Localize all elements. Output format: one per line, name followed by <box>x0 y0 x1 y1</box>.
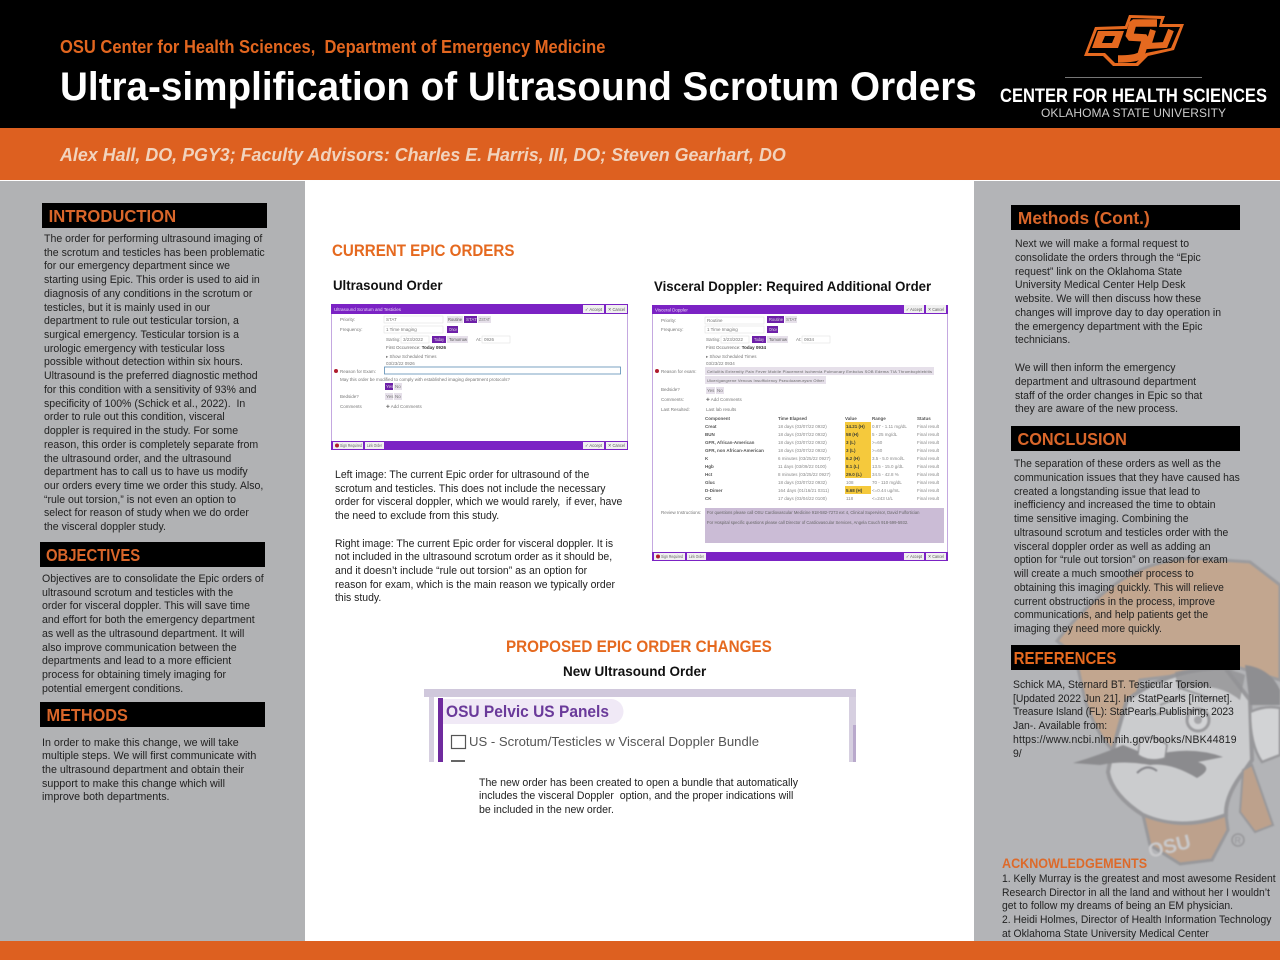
text: introduction: the visceral doppler study. <box>44 521 166 533</box>
text: objectives: departments and lead to a more efficient <box>42 655 231 667</box>
screenshot: ultrasound order form: Routine <box>448 317 462 322</box>
screenshot: ultrasound order form: Comments <box>340 404 363 409</box>
screenshot: visceral doppler order form: 8 minutes (03/25/22 0927) <box>778 472 831 477</box>
screenshot: visceral doppler order form: 29.0 (L) <box>846 472 862 477</box>
screenshot: ultrasound order form: ✚ Add Comments <box>386 404 423 409</box>
text: conclusion: current obstructions in the process, improve <box>1014 596 1215 608</box>
icon: mascot watermark: R <box>1234 836 1242 846</box>
screenshot: visceral doppler order form: 3/23/2022 <box>723 337 744 342</box>
screenshot: ultrasound order form: 03/23/22 0926 <box>386 361 415 366</box>
screenshot: visceral doppler order form: Last lab results <box>706 407 737 412</box>
text: image captions: scrotum and testicles. This does not include the necessary <box>335 483 606 495</box>
text: methods continued: consolidate the orders through the “Epic <box>1015 252 1201 264</box>
screenshot: visceral doppler order form: Comments: <box>661 397 684 402</box>
screenshot: visceral doppler order form: 164 days (01/16/21 0311) <box>778 488 829 493</box>
screenshot: visceral doppler order form: Final result <box>917 472 940 477</box>
text: image captions <box>335 469 622 604</box>
text: conclusion: time sensitive imaging. Combining the <box>1014 513 1189 525</box>
screenshot: visceral doppler order form: ✕ Cancel <box>928 307 944 312</box>
screenshot: ultrasound order form: ZSTAT <box>479 317 490 322</box>
screenshot: visceral doppler order form: 17 days (03/04/22 0100) <box>778 496 827 501</box>
text: methods continued: department and ultrasound department <box>1015 376 1196 388</box>
screenshot: visceral doppler order form: 0.87 - 1.11 mg/dL <box>872 424 907 429</box>
text: references: https://www.ncbi.nlm.nih.gov/books/NBK44819 <box>1013 734 1237 746</box>
screenshot: visceral doppler order form: 70 - 110 mg/dL <box>872 480 902 485</box>
text: introduction: select for reason of study when we do order <box>44 507 249 519</box>
text: references: Treasure Island (FL): StatPearls Publishing; 2023 <box>1013 706 1234 718</box>
icon: OSU brand mark <box>1084 15 1184 66</box>
screenshot: visceral doppler order form: Value <box>845 416 857 421</box>
text: objectives: also improve communication between the <box>42 642 237 654</box>
screenshot: visceral doppler order form: 18 days (03/07/22 0932) <box>778 480 827 485</box>
text: conclusion: visceral doppler order as well as adding an <box>1014 540 1210 552</box>
screenshot: visceral doppler order form: D-Dimer <box>705 488 723 493</box>
screenshot: visceral doppler order form: GFR, African-American <box>705 440 755 445</box>
text: new order description: The new order has been created to open a bundle that automatically <box>479 776 798 788</box>
screenshot: visceral doppler order form: Final result <box>917 456 940 461</box>
text: methods continued <box>1015 238 1221 415</box>
text: introduction <box>44 233 265 533</box>
screenshot: visceral doppler order form: ✓ Accept <box>906 307 923 312</box>
screenshot: ultrasound order form: Yes <box>386 394 394 399</box>
text: references: 9/ <box>1013 748 1022 760</box>
screenshot: visceral doppler order form: Review Instructions: <box>661 510 701 515</box>
text: methods <box>42 736 256 803</box>
text: introduction: our orders every time we order this study. Also, <box>44 480 263 492</box>
logo: OSU Center for Health Sciences <box>1000 15 1267 120</box>
heading: methods continued: Methods (Cont.) <box>1018 208 1150 228</box>
text: introduction: department has to call us to have us modify <box>44 466 248 478</box>
panel: right column with mascot watermark <box>974 181 1280 941</box>
heading: methods: METHODS <box>47 705 128 725</box>
text: new order description: be included in the new order. <box>479 804 614 816</box>
screenshot: visceral doppler order form: Ulcer/gangrene Venous Insufficiency Pseudoaneurysm Other <box>707 378 825 383</box>
text: objectives <box>42 573 264 695</box>
screenshot: visceral doppler order form: Status <box>917 416 931 421</box>
screenshot: visceral doppler order form: BUN <box>705 432 715 437</box>
screenshot: new order bundle: OSU Pelvic US Panels <box>446 702 609 721</box>
screenshot: ultrasound order form: ✓ Accept <box>585 443 603 448</box>
heading: conclusion <box>1011 426 1240 451</box>
text: introduction: reason, this order is completely separate from <box>44 439 258 451</box>
text: methods continued: University Medical Center Help Desk <box>1015 279 1186 291</box>
screenshot: visceral doppler order form: 6 minutes (03/25/22 0927) <box>778 456 831 461</box>
screenshot: visceral doppler order form: First Occurrence: Today 0934 <box>706 345 766 350</box>
text: image captions: and it doesn’t include “rule out torsion” as an option for <box>335 565 587 577</box>
screenshot: visceral doppler order form: 11 days (03/09/22 0100) <box>778 464 827 469</box>
heading: proposed epic order changes: PROPOSED EPIC ORDER CHANGES <box>506 637 772 656</box>
screenshot: visceral doppler order form: For questions please call OSU Cardiovascular Medicine 918-582-7273 ext 4, Clinical Supervisor, David Fulfortician <box>707 510 920 515</box>
screenshot: ultrasound order form: Ultrasound Scrotum and Testicles <box>334 307 402 312</box>
text: conclusion: obtaining this imaging quickly. This will relieve <box>1014 582 1224 594</box>
screenshot: ultrasound order form: Today <box>434 337 445 342</box>
screenshot: visceral doppler order form: Link Order <box>689 554 704 559</box>
screenshot: ultrasound order form: ✕ Cancel <box>608 443 625 448</box>
screenshot: visceral doppler order form: 5.68 (H) <box>846 488 863 493</box>
heading: introduction <box>42 203 267 228</box>
authors band <box>0 128 1280 180</box>
text: objectives: as well as the ultrasound department. It will <box>42 628 244 640</box>
screenshot: visceral doppler order form: At: <box>796 337 802 342</box>
screenshot: visceral doppler order form: For Hospital specific questions please call Director of Cardiovascular Services, Angela Couch 918-599-5932. <box>707 520 908 525</box>
text: methods continued: technicians. <box>1015 334 1070 346</box>
text: introduction: the scrotum and testicles has been problematic <box>44 247 265 259</box>
screenshot: ultrasound order form: ▸ Show Scheduled Times <box>386 354 437 359</box>
screenshot: visceral doppler order form: Routine <box>707 318 723 323</box>
screenshot: visceral doppler order form: ▸ Show Scheduled Times <box>706 354 757 359</box>
screenshot: visceral doppler order form: Final result <box>917 448 940 453</box>
text: acknowledgements: get to follow my dreams of being an EM physician. <box>1002 900 1233 912</box>
text: conclusion: imaging they need more quickly. <box>1014 623 1162 635</box>
text: introduction: specificity of 100% (Schick et al., 2022). In <box>44 398 245 410</box>
screenshot: ultrasound order form: STAT <box>386 317 397 322</box>
heading: conclusion: CONCLUSION <box>1018 429 1127 449</box>
text: methods: support to make this change which will <box>42 778 225 790</box>
text: methods continued: request” link on the Oklahoma State <box>1015 266 1182 278</box>
text: introduction: urologic emergency with testicular loss <box>44 343 225 355</box>
text: methods continued: changes will improve day to day operation in <box>1015 307 1221 319</box>
screenshot: visceral doppler order form: ✕ Cancel <box>928 554 944 559</box>
screenshot: ultrasound order form: Once <box>449 327 457 332</box>
screenshot: new order bundle: US - Scrotum/Testicles w Visceral Doppler Bundle <box>469 734 759 749</box>
screenshot: ultrasound order form: ✕ Cancel <box>608 307 625 312</box>
screenshot: visceral doppler order form: Once <box>769 327 777 332</box>
screenshot: ultrasound order form: Priority: <box>340 317 355 322</box>
text: conclusion: created a longstanding issue that lead to <box>1014 486 1200 498</box>
header bar <box>0 0 1280 128</box>
screenshot: visceral doppler order form: 18 days (03/07/22 0932) <box>778 424 827 429</box>
text: introduction: the ultrasound order, and the ultrasound <box>44 452 231 464</box>
text: acknowledgements <box>1002 873 1276 940</box>
screenshot: visceral doppler order form: 58 (H) <box>846 432 859 437</box>
text: objectives: potential emergent conditions. <box>42 683 183 695</box>
screenshot: visceral doppler order form: 8.1 (L) <box>846 464 860 469</box>
screenshot: ultrasound order form: Frequency: <box>340 327 363 332</box>
screenshot: visceral doppler order form: Starting: <box>706 337 720 342</box>
screenshot: visceral doppler order form: 108 <box>846 480 854 485</box>
text: conclusion: communications, and help patients get the <box>1014 609 1208 621</box>
screenshot: ultrasound order form: No <box>395 394 401 399</box>
text: conclusion: inefficiency and increased the time to obtain <box>1014 499 1215 511</box>
text: objectives: order for visceral doppler. This will save time <box>42 600 250 612</box>
text: methods: In order to make this change, we will take <box>42 736 239 748</box>
screenshot: visceral doppler order form: Reason for exam: <box>661 369 697 374</box>
screenshot: visceral doppler order form: Bedside? <box>661 387 680 392</box>
text: objectives: process for obtaining timely imaging for <box>42 669 226 681</box>
text: methods continued: website. We will then discuss how these <box>1015 293 1201 305</box>
screenshot: visceral doppler order form: Hgb <box>705 464 714 469</box>
screenshot: ultrasound order form: Yes <box>386 384 394 389</box>
screenshot: visceral doppler order form: No <box>717 388 723 393</box>
heading: methods <box>40 702 265 727</box>
text: objectives: and effort for both the emergency department <box>42 614 255 626</box>
screenshot: ultrasound order form <box>331 304 628 450</box>
subheading: visceral doppler: Visceral Doppler: Required Additional Order <box>654 278 931 294</box>
screenshot: ultrasound order form: Sign Required <box>340 443 362 448</box>
screenshot: ultrasound order form: Starting: <box>386 337 400 342</box>
text: methods: multiple steps. We will first communicate with <box>42 750 256 762</box>
text: references: Jan-. Available from: <box>1013 720 1107 732</box>
screenshot: visceral doppler order form: 6.2 (H) <box>846 456 860 461</box>
screenshot: visceral doppler order form: Last Resulted: <box>661 407 690 412</box>
text: methods continued: they are aware of the new process. <box>1015 403 1178 415</box>
title: Ultra-simplification of Ultrasound Scrotum Orders <box>60 65 977 109</box>
screenshot: ultrasound order form: No <box>395 384 401 389</box>
screenshot: visceral doppler order form: Creat <box>705 424 717 429</box>
screenshot: visceral doppler order form: Sign Required <box>661 554 683 559</box>
text: conclusion: ultrasound scrotum and testicles order with the <box>1014 527 1228 539</box>
institution subtitle: OSU Center for Health Sciences, Department of Emergency Medicine <box>60 37 605 57</box>
text: image captions: not included in the ultrasound scrotum order as it should be, <box>335 551 612 563</box>
screenshot: ultrasound order form: ✓ Accept <box>585 307 603 312</box>
screenshot: visceral doppler order form: 18 days (03/07/22 0932) <box>778 432 827 437</box>
screenshot: visceral doppler order form: >=60 <box>872 448 883 453</box>
heading: references: REFERENCES <box>1014 648 1116 668</box>
screenshot: ultrasound order form: Tomorrow <box>449 337 468 342</box>
icon: mascot watermark: OSU <box>1146 831 1193 863</box>
screenshot: visceral doppler order form: Range <box>872 416 886 421</box>
screenshot: visceral doppler order form: 13.5 - 15.0 g/dL <box>872 464 904 469</box>
screenshot: visceral doppler order form: Final result <box>917 440 940 445</box>
authors: Alex Hall, DO, PGY3; Faculty Advisors: Charles E. Harris, III, DO; Steven Gearhart, DO <box>60 144 786 165</box>
screenshot: visceral doppler order form <box>652 305 948 561</box>
screenshot: visceral doppler order form: Routine <box>769 317 783 322</box>
text: methods continued: Next we will make a formal request to <box>1015 238 1189 250</box>
text: methods continued: the emergency department with the Epic <box>1015 321 1202 333</box>
heading: objectives: OBJECTIVES <box>46 545 140 565</box>
screenshot: visceral doppler order form: 5 - 25 mg/dL <box>872 432 898 437</box>
text: introduction: The order for performing ultrasound imaging of <box>44 233 262 245</box>
text: introduction: testicles, but it is mainly used in our <box>44 302 210 314</box>
text: introduction: surgical emergency. Testicular torsion is a <box>44 329 239 341</box>
screenshot: visceral doppler order form: Final result <box>917 424 940 429</box>
screenshot: ultrasound order form: 1 Time Imaging <box>386 327 417 332</box>
screenshot: visceral doppler order form: 0934 <box>804 337 815 342</box>
screenshot: visceral doppler order form: <=243 U/L <box>872 496 894 501</box>
text: introduction: Ultrasound is the preferred diagnostic method <box>44 370 258 382</box>
text: introduction: department to rule out testicular torsion, a <box>44 315 239 327</box>
text: introduction: doppler is required in the study. For some <box>44 425 238 437</box>
subheading: ultrasound order: Ultrasound Order <box>333 277 443 293</box>
text: image captions: order for visceral doppler, which we would rarely, if ever, have <box>335 496 622 508</box>
text: introduction: for this condition with a sensitivity of 93% and <box>44 384 256 396</box>
screenshot: visceral doppler order form: 03/23/22 0934 <box>706 361 735 366</box>
screenshot: visceral doppler order form: 34.5 - 42.8 % <box>872 472 899 477</box>
text: objectives: Objectives are to consolidate the Epic orders of <box>42 573 264 585</box>
screenshot: visceral doppler order form: Final result <box>917 480 940 485</box>
heading: introduction: INTRODUCTION <box>49 206 176 226</box>
text: image captions: the need to exclude from this study. <box>335 510 499 522</box>
subheading: new ultrasound order: New Ultrasound Order <box>563 663 706 679</box>
screenshot: visceral doppler order form: 1 Time Imaging <box>707 327 738 332</box>
screenshot: ultrasound order form: At: <box>476 337 482 342</box>
screenshot: visceral doppler order form: 18 days (03/07/22 0932) <box>778 448 827 453</box>
text: introduction: diagnosis of any conditions in the scrotum or <box>44 288 252 300</box>
text: introduction: order to rule out this condition, visceral <box>44 411 225 423</box>
heading: objectives <box>40 542 265 567</box>
text: references: Schick MA, Sternard BT. Testicular Torsion. <box>1013 679 1212 691</box>
heading: current epic orders: CURRENT EPIC ORDERS <box>332 241 514 260</box>
text: methods: the ultrasound department and obtain their <box>42 764 244 776</box>
screenshot: ultrasound order form: 3/23/2022 <box>403 337 424 342</box>
text: methods continued: We will then inform the emergency <box>1015 362 1175 374</box>
text: conclusion: will create a much smoother process to <box>1014 568 1194 580</box>
text: conclusion: The separation of these orders as well as the <box>1014 458 1221 470</box>
screenshot: visceral doppler order form: 118 <box>846 496 854 501</box>
text: new order description: includes the visceral Doppler option, and the proper indications will <box>479 790 793 802</box>
logo: OSU Center for Health Sciences: OKLAHOMA STATE UNIVERSITY <box>1041 106 1226 120</box>
screenshot: visceral doppler order form: Final result <box>917 432 940 437</box>
screenshot: visceral doppler order form: Final result <box>917 464 940 469</box>
screenshot: visceral doppler order form: Cellulitis Extremity Pain Fever Mobile Placement Ischemia Pulmonary Embolus SOB Edema TIA Thrombophlebitis <box>707 369 932 374</box>
text: image captions: Left image: The current Epic order for ultrasound of the <box>335 469 589 481</box>
heading: acknowledgements: ACKNOWLEDGEMENTS <box>1002 856 1147 871</box>
screenshot: visceral doppler order form: Gluc <box>705 480 715 485</box>
screenshot: visceral doppler order form: CK <box>705 496 712 501</box>
text: image captions: reason for exam, which is the main reason we typically order <box>335 579 615 591</box>
text: acknowledgements: 2. Heidi Holmes, Director of Health Information Technology <box>1002 914 1271 926</box>
text: methods: improve both departments. <box>42 791 170 803</box>
text: introduction: for our emergency department since we <box>44 260 230 272</box>
text: acknowledgements: at Oklahoma State University Medical Center <box>1002 928 1209 940</box>
screenshot: ultrasound order form: Bedside? <box>340 394 359 399</box>
screenshot: visceral doppler order form: 14.21 (H) <box>846 424 865 429</box>
screenshot: visceral doppler order form: Component <box>705 416 730 421</box>
text: methods continued: staff of the order changes in Epic so that <box>1015 390 1202 402</box>
screenshot: visceral doppler order form: STAT <box>786 317 797 322</box>
screenshot: visceral doppler order form: Final result <box>917 488 940 493</box>
screenshot: visceral doppler order form: Hct <box>705 472 713 477</box>
screenshot: visceral doppler order form: Frequency: <box>661 327 684 332</box>
screenshot: ultrasound order form: May this order be modified to comply with established imaging department protocols? <box>340 377 510 382</box>
screenshot: visceral doppler order form: ✓ Accept <box>906 554 923 559</box>
screenshot: visceral doppler order form: 3 (L) <box>846 448 856 453</box>
screenshot: visceral doppler order form: Final result <box>917 496 940 501</box>
text: image captions: this study. <box>335 592 381 604</box>
screenshot: ultrasound order form: First Occurrence: Today 0926 <box>386 345 446 350</box>
screenshot: visceral doppler order form: >=60 <box>872 440 883 445</box>
text: new order description <box>479 776 798 816</box>
heading: methods continued <box>1011 205 1240 230</box>
screenshot: visceral doppler order form: Time Elapsed <box>778 416 807 421</box>
text: introduction: starting using Epic. This order is used to aid in <box>44 274 260 286</box>
screenshot: visceral doppler order form: ✚ Add Comments <box>706 397 743 402</box>
text: conclusion: communication issues that they have caused has <box>1014 472 1240 484</box>
screenshot: visceral doppler order form: 18 days (03/07/22 0932) <box>778 440 827 445</box>
screenshot: new order bundle <box>424 689 856 762</box>
screenshot: visceral doppler order form: 3.5 - 5.0 mmol/L <box>872 456 905 461</box>
screenshot: visceral doppler order form: K <box>705 456 709 461</box>
screenshot: visceral doppler order form: Tomorrow <box>769 337 788 342</box>
panel: left column <box>0 181 305 941</box>
icon: mascot watermark <box>1057 558 1280 864</box>
screenshot: visceral doppler order form: Today <box>754 337 765 342</box>
screenshot: visceral doppler order form: 3 (L) <box>846 440 856 445</box>
text: image captions: Right image: The current Epic order for visceral doppler. It is <box>335 538 613 550</box>
text: acknowledgements: Research Director in all the land and without her I wouldn’t <box>1002 887 1270 899</box>
screenshot: visceral doppler order form: GFR, non African-American <box>705 448 764 453</box>
text: conclusion <box>1014 458 1240 635</box>
screenshot: visceral doppler order form: <=0.44 ug/mL <box>872 488 900 493</box>
screenshot: visceral doppler order form: Priority: <box>661 318 676 323</box>
screenshot: ultrasound order form: Reason for Exam: <box>340 369 376 374</box>
screenshot: visceral doppler order form: Yes <box>707 388 715 393</box>
text: references: [Updated 2022 Jun 21]. In: StatPearls [Internet]. <box>1013 693 1232 705</box>
text: introduction: possible without detection within six hours. <box>44 356 243 368</box>
text: introduction: “rule out torsion,” is not even an option to <box>44 494 236 506</box>
screenshot: ultrasound order form: 0926 <box>484 337 495 342</box>
text: objectives: ultrasound scrotum and testicles with the <box>42 587 233 599</box>
text: references <box>1013 679 1237 760</box>
heading: references <box>1011 645 1240 670</box>
screenshot: ultrasound order form: STAT <box>466 317 477 322</box>
footer bar <box>0 941 1280 960</box>
text: acknowledgements: 1. Kelly Murray is the greatest and most awesome Resident <box>1002 873 1276 885</box>
screenshot: ultrasound order form: Link Order <box>367 443 382 448</box>
text: conclusion: option for “rule out torsion” on reason for exam <box>1014 554 1228 566</box>
screenshot: visceral doppler order form: Visceral Doppler <box>655 308 688 312</box>
